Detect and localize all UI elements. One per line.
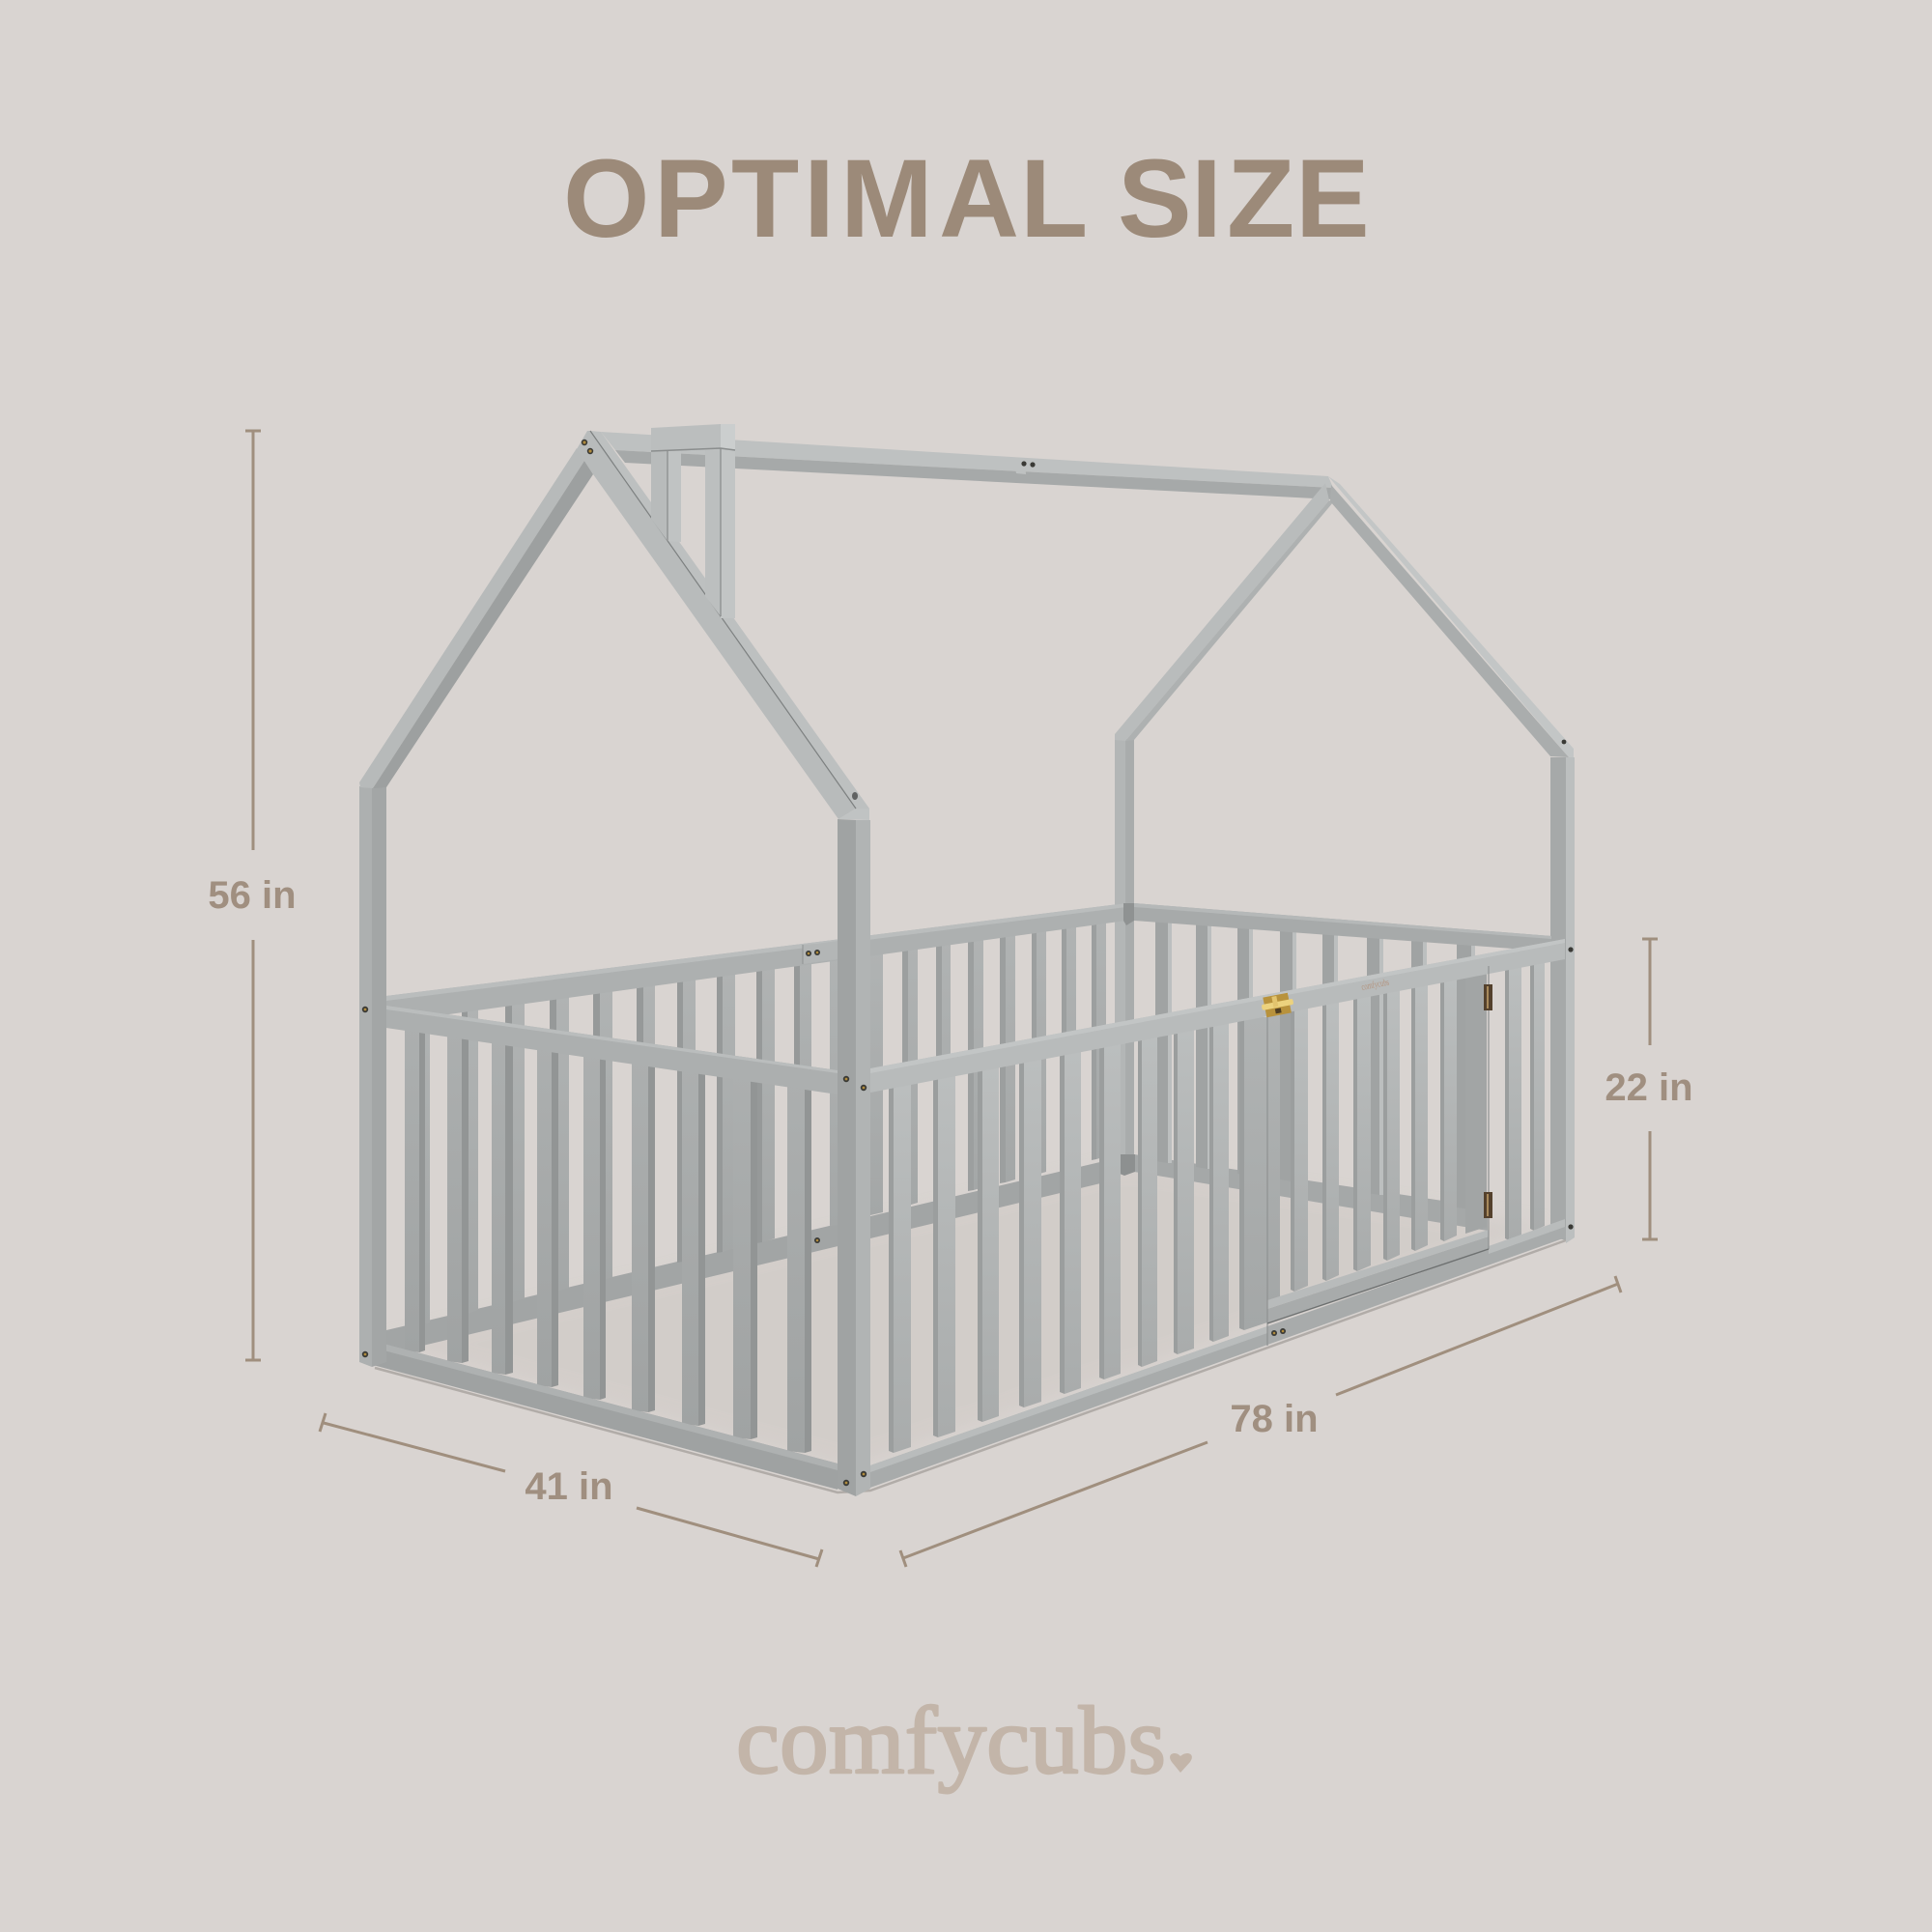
dimension: length 78 in: 78 in — [1230, 1398, 1319, 1440]
chimney — [651, 424, 735, 618]
title: OPTIMAL SIZE — [563, 137, 1370, 261]
floor shading — [375, 1164, 1566, 1492]
dimension: height 56 in — [208, 431, 297, 1360]
rails: near long side — [870, 939, 1566, 1488]
dimension: height 56 in: 56 in — [208, 874, 297, 917]
dimension: length 78 in — [900, 1276, 1621, 1567]
slats: fixed end section — [1505, 961, 1545, 1240]
rails: near short side — [373, 1004, 838, 1490]
logo: comfycubs — [736, 1687, 1166, 1794]
left post — [359, 786, 386, 1367]
slats: near short side — [405, 1024, 811, 1453]
back top rails — [386, 903, 1551, 1243]
door — [1267, 974, 1489, 1323]
door slats — [1267, 974, 1487, 1306]
slats: near long side — [889, 1017, 1267, 1453]
dimension: width 41 in — [320, 1413, 822, 1567]
latch — [1260, 992, 1295, 1018]
dimension: height 22 in — [1605, 939, 1693, 1239]
left rafter — [359, 448, 593, 788]
rear gable frame — [1115, 476, 1575, 1243]
slats: back long side — [419, 919, 1106, 1325]
bed frame illustration — [359, 424, 1575, 1496]
hinge: top — [1484, 984, 1492, 1010]
door bottom rail — [1267, 1230, 1489, 1323]
right rafter — [577, 431, 869, 820]
ridge beam — [601, 432, 1333, 499]
dimension: width 41 in: 41 in — [525, 1465, 613, 1508]
icon: heart — [1170, 1753, 1192, 1773]
slats: far short side — [1155, 918, 1475, 1209]
back bottom rails — [386, 1154, 1488, 1354]
front gable frame — [359, 431, 1574, 1496]
rail logo: comfycubs — [1360, 978, 1390, 993]
centre post — [838, 819, 870, 1496]
dimension: height 22 in: 22 in — [1605, 1066, 1693, 1109]
hinge: bottom — [1484, 1192, 1492, 1218]
post screws — [362, 947, 1574, 1486]
